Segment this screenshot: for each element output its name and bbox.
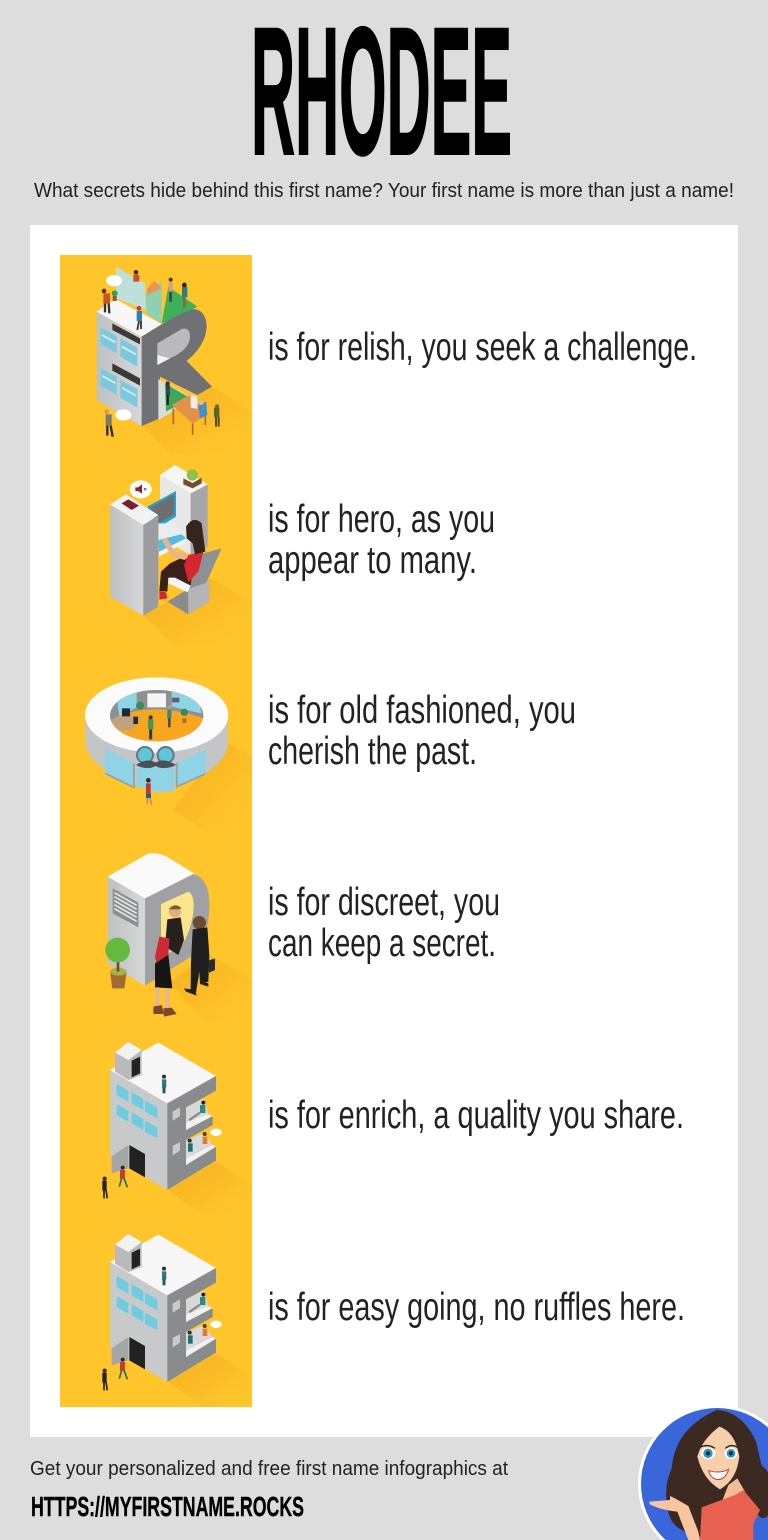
doorway (112, 1337, 128, 1365)
text: O lines: is for old fashioned, you (268, 689, 576, 732)
footer url: HTTPS://MYFIRSTNAME.ROCKS (31, 1491, 304, 1522)
icon: eye chart (147, 693, 166, 707)
icon: chair (167, 548, 222, 614)
icon: letter O optician (85, 677, 246, 818)
icon: second letter E building (102, 1234, 252, 1407)
panel: white card (30, 225, 738, 1437)
person: woman in red (153, 937, 177, 1017)
icon: muted speaker bubble (130, 480, 152, 498)
person: woman in blue on roof (137, 306, 142, 330)
person: woman at desk (159, 520, 205, 600)
icon: letter H desk (110, 465, 252, 645)
person: man at right (166, 381, 219, 427)
text: O lines: cherish the past. (268, 730, 477, 773)
people (102, 1267, 222, 1390)
text: D lines: is for discreet, you (268, 881, 500, 924)
icon: letter R building (97, 267, 252, 455)
icon: glasses and moustache (136, 747, 176, 768)
icon: potted plant (183, 469, 202, 488)
text: H lines (268, 498, 495, 582)
text: H lines: is for hero, as you (268, 498, 495, 541)
icon: wall vent (113, 888, 138, 927)
footer text: Get your personalized and free first name infographics at (30, 1458, 508, 1480)
icon: avatar woman (638, 1405, 768, 1540)
icon: letter D building (105, 853, 252, 1023)
person: man with speech bubble bottom (104, 409, 131, 437)
windows (117, 1084, 157, 1138)
people: rooftop pair (133, 270, 187, 308)
person: man in doorway (165, 905, 184, 955)
text: O lines (268, 689, 576, 773)
person: man with briefcase (184, 916, 215, 996)
icon: potted tree (105, 938, 130, 988)
person: man with speech bubble (102, 275, 122, 313)
panel: yellow illustration strip (60, 255, 252, 1407)
doorway (112, 1145, 128, 1173)
text: D lines: can keep a secret. (268, 922, 496, 965)
person: walking woman (146, 778, 152, 805)
windows (117, 1276, 157, 1330)
people in the shop (133, 705, 171, 739)
people (102, 1075, 222, 1198)
subtitle: What secrets hide behind this first name? Your first name is more than just a name! (34, 180, 734, 202)
text: H lines: appear to many. (268, 539, 477, 582)
text: D lines (268, 881, 500, 965)
icon: letter E building (102, 1042, 252, 1217)
